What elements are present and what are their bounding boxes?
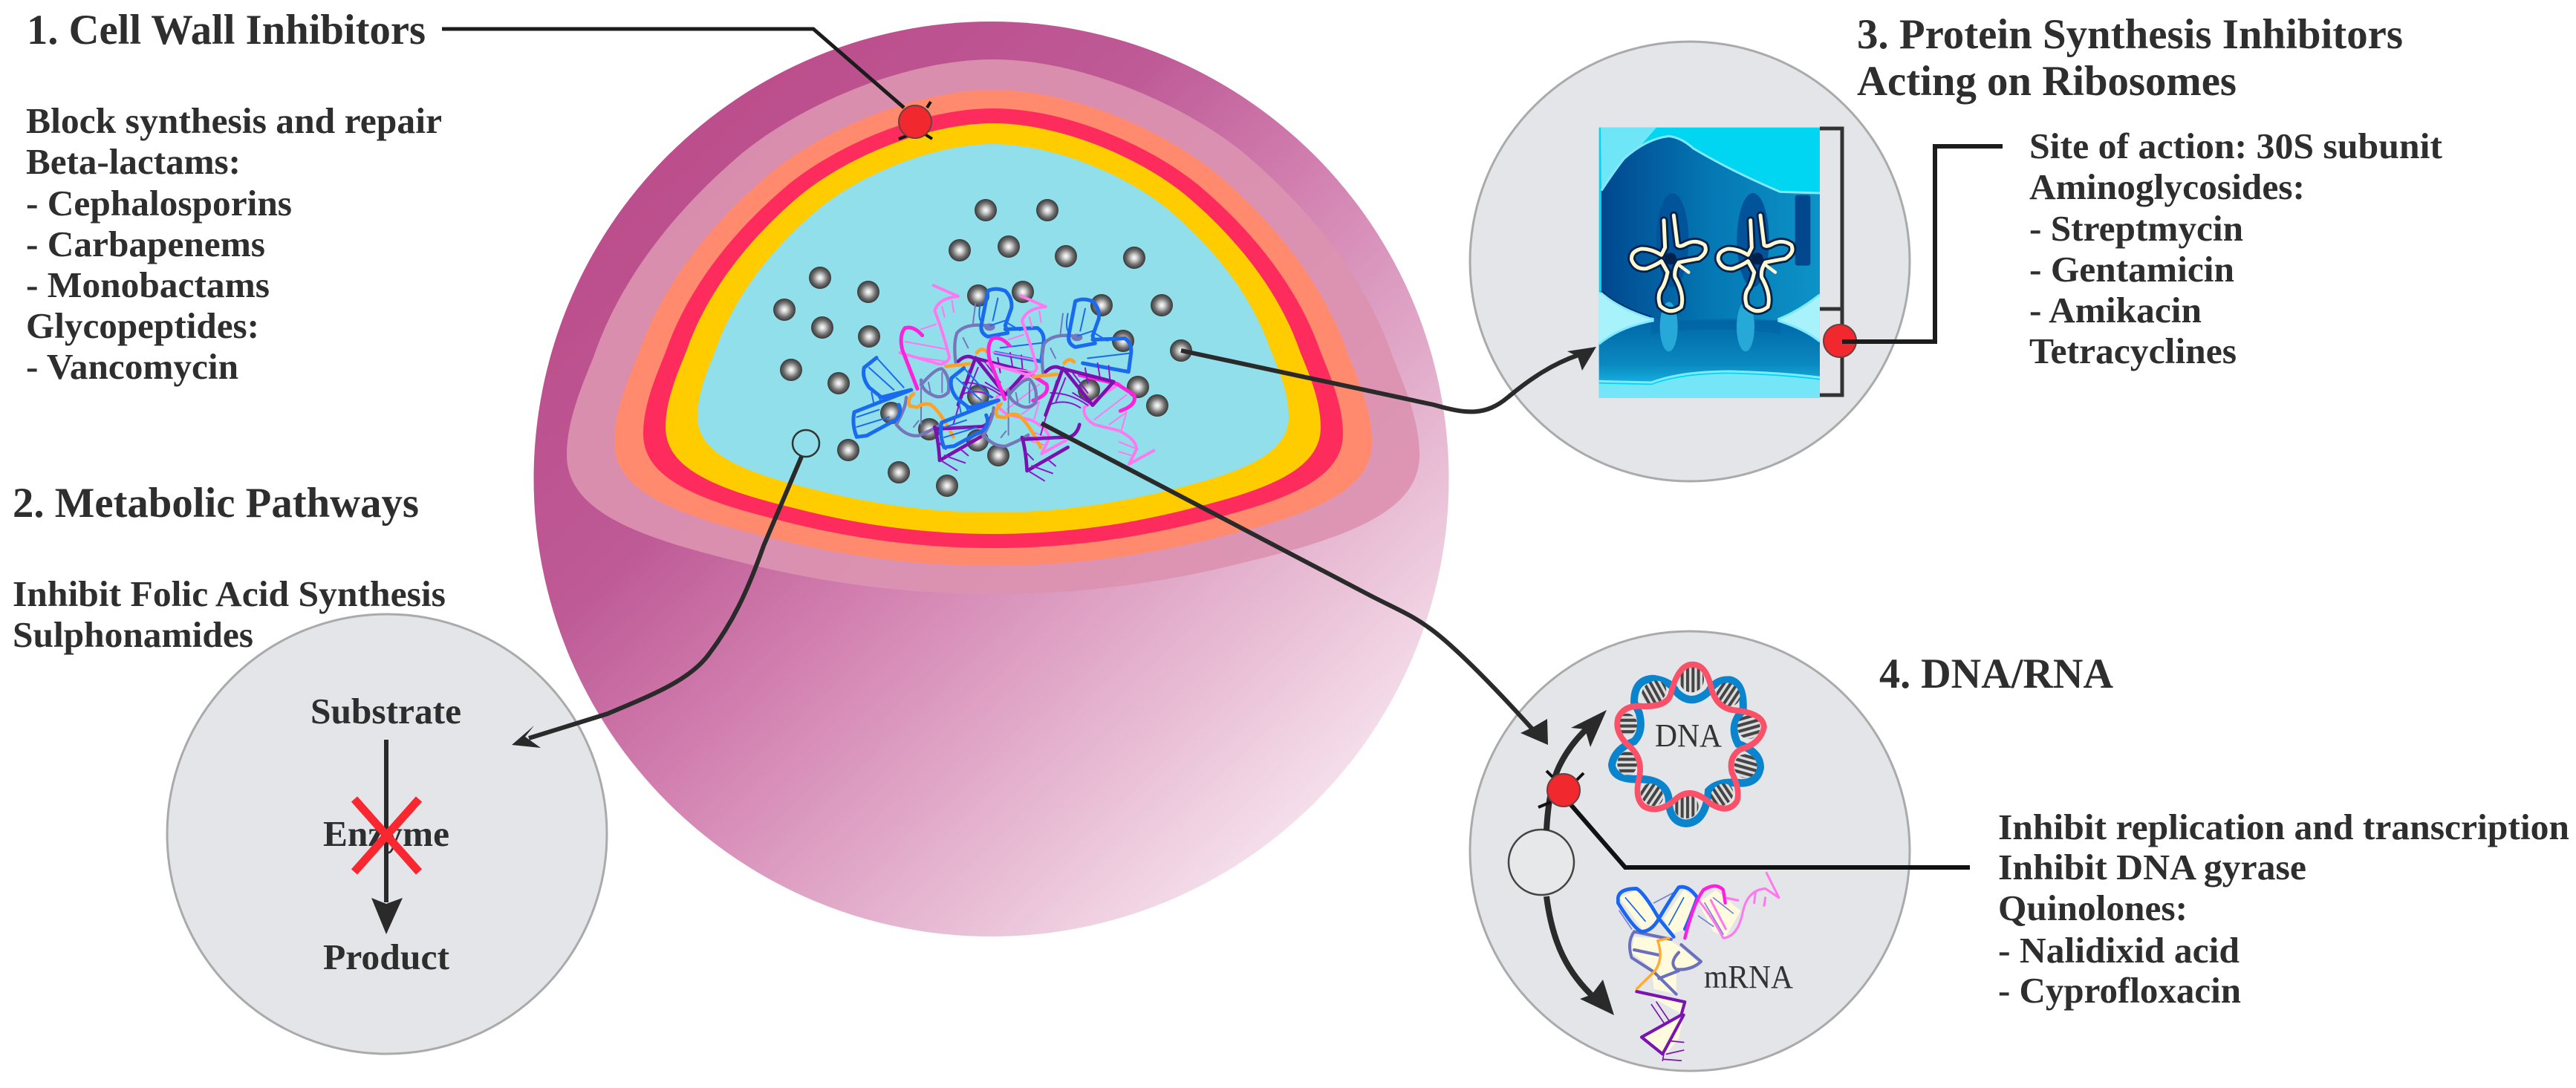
circle: ribosome inset [1470,42,1910,481]
text block 3: - Amikacin [2029,290,2202,330]
replication origin circle [1509,830,1574,895]
text block 1: Glycopeptides: [26,305,259,346]
leader line 3 [1842,146,2003,342]
ribosome particles [773,199,1192,497]
circle: DNA/RNA inset [1470,631,1910,1071]
ribosome picture [1599,128,1820,398]
layer: crimson wall [643,108,1343,548]
nucleic acid tangle [853,285,1154,481]
red cross [354,799,419,872]
heading 4: 4. DNA/RNA [1879,651,2113,697]
replication arrow to DNA [1546,710,1607,830]
heading 3 [1857,11,2403,105]
text block 3: - Gentamicin [2029,249,2234,290]
DNA plasmid [1612,665,1764,824]
text block 1: - Cephalosporins [26,183,292,224]
leader line 4 [1567,801,1970,867]
text block 3: Tetracyclines [2029,330,2237,371]
mRNA structure [1618,873,1779,1061]
circle: pathway inset [167,614,607,1054]
substrate label: Substrate [310,691,461,732]
text block 1: Block synthesis and repair [26,100,442,141]
text block 4: Quinolones: [1998,887,2188,928]
heading 3: Acting on Ribosomes [1857,58,2237,105]
text block 4: Inhibit replication and transcription [1998,807,2569,847]
outer cell body [533,22,1448,936]
cell sphere [533,22,1448,936]
text block 1: - Monobactams [26,264,270,305]
text block 2: Sulphonamides [13,614,253,655]
text block 4: - Nalidixid acid [1998,930,2240,971]
arrow: cell to DNA/RNA [1041,423,1548,745]
layer: salmon wall [614,90,1372,566]
text block 2 [13,573,446,655]
heading 3: 3. Protein Synthesis Inhibitors [1857,11,2403,58]
text block 1 [26,100,442,387]
DNA label: DNA [1655,717,1722,754]
panel: 1 cell wall inhibitors [26,7,932,387]
target marker 1 [899,102,932,139]
text block 3: - Streptmycin [2029,208,2243,249]
panel: 2 metabolic pathways [13,457,801,1054]
panel: 4 DNA/RNA [1041,423,2569,1071]
text block 3: Aminoglycosides: [2029,166,2305,207]
layer: outer membrane [567,59,1419,594]
target marker 3 [1824,325,1856,357]
bracket [1820,128,1842,395]
text block 3: Site of action: 30S subunit [2029,126,2443,166]
arrow: cell to ribosome [1181,347,1596,411]
layer: yellow membrane [666,123,1321,534]
arrow: cell to pathway [512,457,801,748]
transcription arrow to mRNA [1546,896,1614,1015]
heading 2: 2. Metabolic Pathways [13,480,419,527]
text block 3 [2029,126,2443,371]
layer: cytoplasm [697,144,1289,512]
heading 1: 1. Cell Wall Inhibitors [27,7,426,53]
text block 1: Beta-lactams: [26,141,241,182]
text block 4: - Cyprofloxacin [1998,970,2241,1011]
mRNA label: mRNA [1704,959,1793,995]
panel: 3 protein synthesis inhibitors [1181,11,2443,481]
small open circle [793,430,819,457]
target marker 4 [1538,771,1584,807]
text block 4 [1998,807,2569,1011]
leader line 1 [442,29,904,108]
text block 2: Inhibit Folic Acid Synthesis [13,573,446,614]
pathway arrow [371,740,403,934]
enzyme label: Enzyme [323,813,449,854]
text block 1: - Carbapenems [26,224,265,264]
text block 4: Inhibit DNA gyrase [1998,847,2306,887]
text block 1: - Vancomycin [26,346,238,387]
product label: Product [323,936,450,977]
